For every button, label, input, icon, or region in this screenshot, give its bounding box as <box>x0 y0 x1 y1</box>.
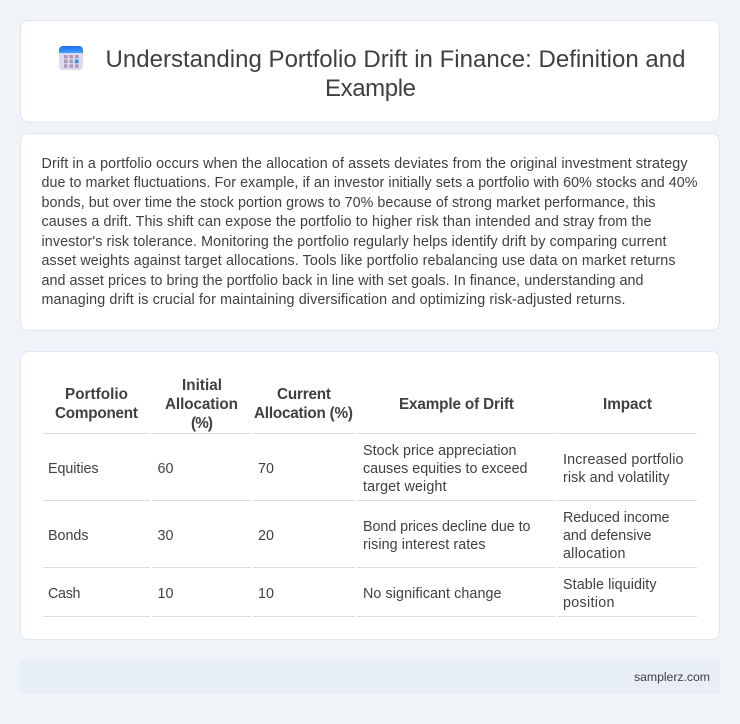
table row: cash <box>48 577 657 611</box>
table row: equities: 70 <box>258 461 274 477</box>
paragraph text: managing drift is crucial for maintaining diversification and optimizing risk-adjusted returns. <box>42 292 626 308</box>
table header row: Allocation <box>165 396 238 413</box>
table row: bonds: and defensive <box>563 528 652 544</box>
paragraph text: Drift in a portfolio occurs when the allocation of assets deviates from the original investment strategy <box>42 156 688 172</box>
table row: cash: position <box>563 595 615 611</box>
table row: equities <box>48 443 684 495</box>
table row: bonds: 20 <box>258 528 274 544</box>
table header row: Impact <box>603 396 652 413</box>
table row: equities: 60 <box>158 461 174 477</box>
table row: cash: Cash <box>48 586 81 602</box>
table row: equities: Equities <box>48 461 98 477</box>
table header row: Portfolio <box>65 386 128 403</box>
footer source text: samplerz.com <box>634 670 710 684</box>
paragraph text: bonds, but over time the stock portion grows to 70% because of strong market performance, this <box>42 195 656 211</box>
title: Understanding Portfolio Drift in Finance: Definition and <box>106 46 686 73</box>
table row: bonds <box>48 510 670 562</box>
table header row: Component <box>55 405 138 422</box>
icon: calendar <box>59 46 83 70</box>
table header row: (%) <box>191 415 213 432</box>
table row: cash: 10 <box>158 586 174 602</box>
table row: bonds: Bond prices decline due to <box>363 519 531 535</box>
table header row: Current <box>277 386 331 403</box>
table row: equities: causes equities to exceed <box>363 461 528 477</box>
footer bar <box>20 660 720 694</box>
table row: bonds: rising interest rates <box>363 537 486 553</box>
title <box>106 46 686 102</box>
table row: cash: No significant change <box>363 586 502 602</box>
paragraph text: causes a drift. This shift can expose the portfolio to higher risk than intended and stray from the <box>42 214 652 230</box>
table header row: Initial <box>182 377 222 394</box>
table row: bonds: Reduced income <box>563 510 670 526</box>
table header row: Example of Drift <box>399 396 514 413</box>
panel: title header <box>20 20 720 122</box>
paragraph text: due to market fluctuations. For example, if an investor initially sets a portfolio with 60% stocks and 40% <box>42 175 698 191</box>
table row: equities: Increased portfolio <box>563 452 684 468</box>
paragraph text: asset weights against target allocations. Tools like portfolio rebalancing use data on market returns <box>42 253 676 269</box>
title: Example <box>325 75 416 102</box>
table header row: Allocation (%) <box>254 405 353 422</box>
paragraph text: and asset prices to bring the portfolio back in line with set goals. In finance, understanding and <box>42 273 644 289</box>
panel: definition paragraph <box>20 134 720 330</box>
paragraph text: investor's risk tolerance. Monitoring the portfolio regularly helps identify drift by comparing current <box>42 234 667 250</box>
table row: cash: 10 <box>258 586 274 602</box>
table row: bonds: 30 <box>158 528 174 544</box>
table row: bonds: Bonds <box>48 528 88 544</box>
paragraph text <box>42 156 698 308</box>
table row: equities: risk and volatility <box>563 470 670 486</box>
table row: cash: Stable liquidity <box>563 577 657 593</box>
panel: drift table <box>20 352 720 640</box>
table row: equities: target weight <box>363 479 447 495</box>
table row: bonds: allocation <box>563 546 626 562</box>
table header row <box>55 377 652 432</box>
table row: equities: Stock price appreciation <box>363 443 517 459</box>
